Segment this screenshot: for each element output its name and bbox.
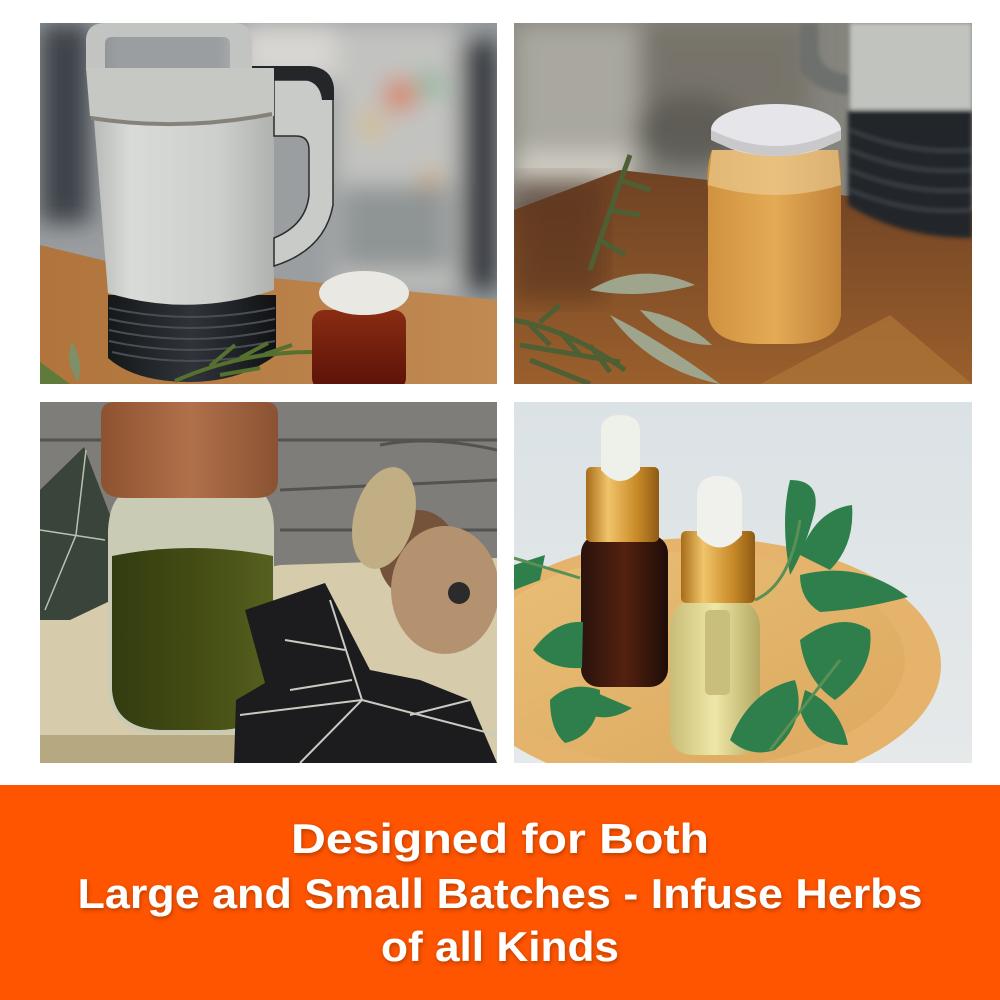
panel: kettle with red infusion jar xyxy=(40,23,497,390)
panel: olive oil jar with ivy xyxy=(40,402,499,763)
blurred kettle xyxy=(800,23,972,238)
blurred kitchen background xyxy=(40,23,497,293)
mint leaves xyxy=(514,480,908,752)
ivy leaf left xyxy=(40,447,112,620)
wooden spools xyxy=(380,510,449,588)
kettle handle xyxy=(274,80,333,266)
kettle base xyxy=(108,295,276,382)
banner heading: of all Kinds xyxy=(381,923,619,970)
amber dropper bottle xyxy=(581,535,668,687)
banner heading: Large and Small Batches - Infuse Herbs xyxy=(78,870,922,917)
clear dropper bottle xyxy=(670,600,760,755)
wood tray xyxy=(514,538,941,763)
herb sprigs xyxy=(175,343,312,381)
wooden lid xyxy=(101,402,278,498)
banner heading: Designed for Both xyxy=(291,815,709,862)
dark ivy leaf xyxy=(234,583,497,763)
wooden counter xyxy=(40,245,497,384)
kettle body xyxy=(94,116,274,305)
table top xyxy=(514,170,972,384)
table xyxy=(40,558,497,763)
panel: honey jar on wood xyxy=(514,23,972,384)
honey jar xyxy=(708,150,841,344)
sage and rosemary sprigs xyxy=(590,274,720,384)
banner heading xyxy=(78,815,922,970)
kettle lid handle xyxy=(86,23,252,70)
olive oil jar xyxy=(108,490,274,734)
weathered board background xyxy=(40,402,497,566)
panel: essential oil droppers with mint xyxy=(514,402,972,763)
orange banner xyxy=(0,785,1000,1000)
red jar xyxy=(312,310,406,390)
